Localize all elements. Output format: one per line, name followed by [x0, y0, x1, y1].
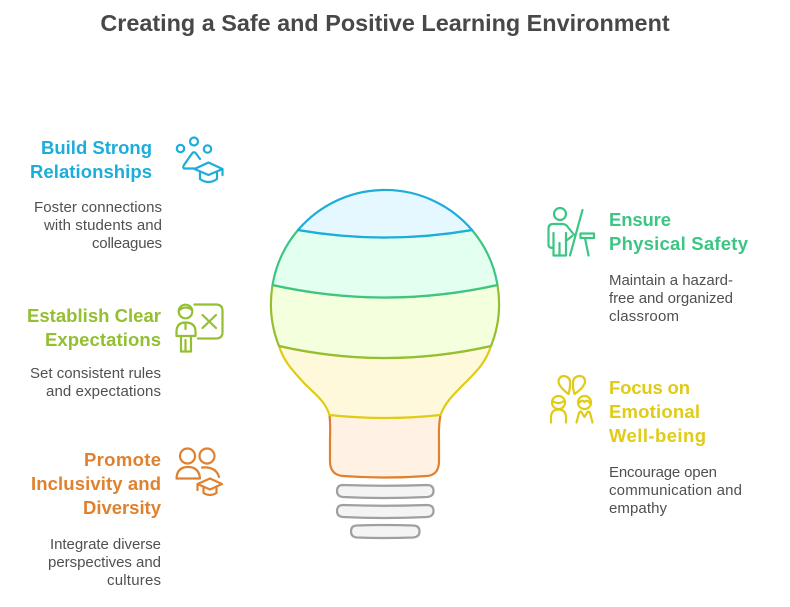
heading: Physical Safety [609, 233, 749, 254]
description: classroom [609, 308, 679, 325]
title: Creating a Safe and Positive Learning Environment [100, 10, 670, 36]
description: Maintain a hazard- [609, 272, 733, 289]
heading: Inclusivity and [31, 473, 161, 494]
lightbulb diagram [271, 190, 499, 538]
heading: Emotional [609, 401, 700, 422]
block: Establish Clear Expectations [27, 305, 161, 400]
description: empathy [609, 500, 668, 517]
description: and expectations [46, 383, 161, 400]
bulb segment: blue top [298, 190, 472, 238]
description: Integrate diverse [50, 536, 161, 553]
description: free and organized [609, 290, 733, 307]
bulb base: screw thread 2 [337, 505, 434, 518]
heading: Ensure [609, 209, 671, 230]
heading: Relationships [30, 161, 152, 182]
block: Focus on Emotional Well-being [609, 377, 742, 517]
block: Ensure Physical Safety [609, 209, 749, 325]
icon: people and graduation cap [177, 138, 222, 182]
bulb base: screw thread 1 [337, 485, 434, 498]
description: Set consistent rules [30, 365, 161, 382]
bulb base: screw thread 3 [351, 525, 420, 538]
icon: person with pole and desk [548, 208, 594, 256]
heading: Promote [84, 449, 161, 470]
block: Promote Inclusivity and Diversity [31, 449, 162, 589]
bulb segment: lime [271, 285, 499, 358]
heading: Diversity [83, 497, 162, 518]
description: with students and [43, 217, 162, 234]
heading: Well-being [609, 425, 706, 446]
icon: two people with heart [551, 376, 592, 422]
description: Encourage open [609, 464, 717, 481]
description: perspectives and [48, 554, 161, 571]
icon: two people and graduation cap [176, 448, 222, 495]
heading: Focus on [609, 377, 690, 398]
icon: teacher with board and X [176, 304, 222, 352]
heading: Build Strong [41, 137, 152, 158]
description: communication and [609, 482, 742, 499]
description: cultures [107, 572, 161, 589]
block: Build Strong Relationships [30, 137, 162, 252]
bulb segment: yellow [279, 346, 491, 418]
heading: Expectations [45, 329, 161, 350]
description: Foster connections [34, 199, 162, 216]
bulb segment: green [272, 230, 498, 298]
description: colleagues [92, 235, 162, 252]
heading: Establish Clear [27, 305, 161, 326]
bulb segment: orange neck [330, 415, 440, 478]
